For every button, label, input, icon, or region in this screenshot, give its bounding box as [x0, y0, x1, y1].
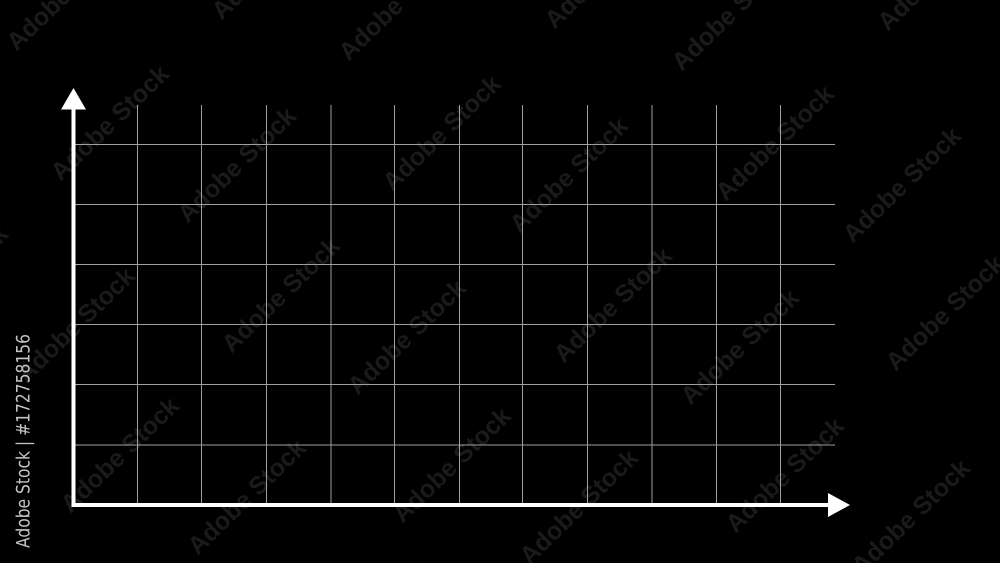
grid lines: [75, 105, 835, 503]
watermark pattern: Adobe Stock: [387, 402, 517, 528]
y axis arrow: [61, 88, 86, 507]
watermark pattern: Adobe Stock: [55, 392, 185, 518]
watermark pattern: Adobe Stock: [377, 70, 507, 196]
watermark pattern: Adobe Stock: [720, 412, 850, 538]
watermark pattern: Adobe Stock: [172, 102, 302, 228]
watermark pattern: Adobe Stock: [675, 284, 805, 410]
watermark pattern: Adobe Stock: [504, 112, 634, 238]
watermark pattern: Adobe Stock: [548, 242, 678, 368]
watermark pattern: Adobe Stock: [837, 122, 967, 248]
watermark pattern: Adobe Stock: [342, 274, 472, 400]
watermark pattern: Adobe Stock: [182, 434, 312, 560]
watermark pattern: Adobe Stock: [710, 80, 840, 206]
stock id label: Adobe Stock | #172758156: [12, 334, 34, 548]
watermark pattern: Adobe Stock: [45, 60, 175, 186]
x axis arrow: [72, 493, 850, 517]
watermark pattern: Adobe Stock: [216, 232, 346, 358]
watermark pattern: Adobe Stock: [11, 262, 141, 388]
